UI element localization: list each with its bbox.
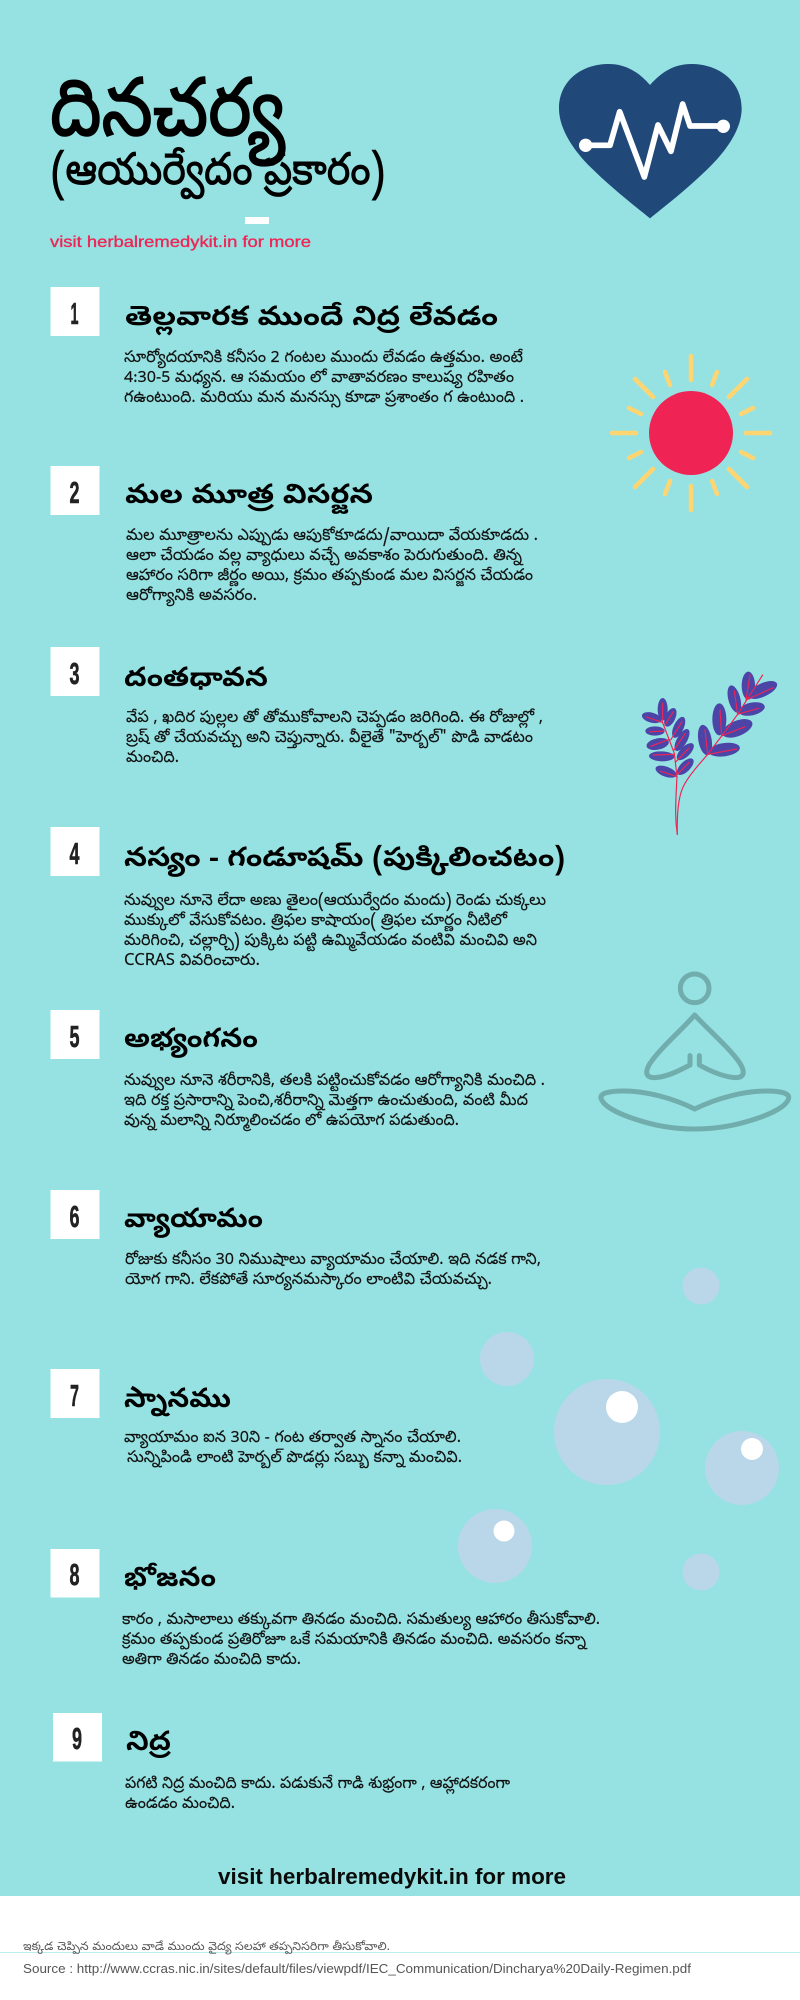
disclaimer: ఇక్కడ చెప్పిన మందులు వాడే ముందు వైద్య సలహా తప్పనిసరిగా తీసుకోవాలి. — [23, 1940, 390, 1956]
panel: step 2: ఆలా చేయడం వల్ల వ్యాధులు వచ్చే అవకాశం పెరుగుతుంది. తిన్న — [126, 546, 524, 568]
panel: step 8: భోజనం — [124, 1562, 216, 1600]
panel: step 6: రోజుకు కనీసం 30 నిముషాలు వ్యాయామం చేయాలి. ఇది నడక గాని, — [125, 1250, 541, 1272]
panel: step 8 — [50, 1549, 600, 1672]
panel: step 3: వేప , ఖదిర పుల్లల తో తోముకోవాలని చెప్పడం జరిగింది. ఈ రోజుల్లో , — [126, 708, 543, 730]
panel: step 1: గఉంటుంది. మరియు మన మనస్సు కూడా ప్రశాంతం గ ఉంటుంది . — [124, 388, 524, 410]
panel: step 6: వ్యాయామం — [124, 1205, 263, 1241]
panel: step 5: అభ్యంగనం — [124, 1025, 258, 1061]
panel: step 4: ముక్కులో వేసుకోవటం. త్రిఫల కాషాయం( త్రిఫల చూర్ణం నీటిలో — [124, 911, 509, 933]
panel: step 3: బ్రష్ తో చేయవచ్చు అని చెప్తున్నారు. వీలైతే "హెర్బల్" పొడి వాడటం — [126, 728, 533, 750]
panel: step 1: తెల్లవారక ముందే నిద్ర లేవడం — [125, 301, 498, 339]
panel: step 1: 4:30-5 మధ్యన. ఆ సమయం లో వాతావరణం కాలుష్య రహితం — [124, 368, 514, 390]
panel: step 6 — [50, 1190, 541, 1292]
bottom link text: visit herbalremedykit.in for more — [218, 1864, 566, 1889]
panel: step 1: 1 — [70, 296, 78, 331]
panel: step 7: 7 — [70, 1378, 79, 1413]
title: దినచర్య — [50, 65, 285, 174]
panel: step 7: స్నానము — [124, 1385, 231, 1421]
panel: step 9: 9 — [72, 1721, 82, 1756]
panel: step 4: నువ్వుల నూనె లేదా అణు తైలం(ఆయుర్వేదం మందు) రెండు చుక్కలు — [124, 891, 546, 913]
panel: step 5: నువ్వుల నూనె శరీరానికి, తలకి పట్టించుకోవడం ఆరోగ్యానికి మంచిది . — [124, 1071, 545, 1093]
panel: step 5: 5 — [70, 1019, 80, 1054]
panel: step 9: ఉండడం మంచిది. — [125, 1794, 235, 1816]
panel: step 3: మంచిది. — [126, 748, 179, 770]
decoration: bubbles — [458, 1268, 779, 1590]
panel: step 4 — [50, 827, 565, 973]
icon: sun — [612, 356, 770, 510]
panel: step 1: సూర్యోదయానికి కనీసం 2 గంటల ముందు లేవడం ఉత్తమం. అంటే — [124, 348, 524, 370]
panel: step 7: వ్యాయామం ఐన 30ని - గంట తర్వాత స్నానం చేయాలి. — [124, 1428, 461, 1450]
source: Source : http://www.ccras.nic.in/sites/default/files/viewpdf/IEC_Communication/Dincharya%20Daily-Regimen.pdf — [23, 1962, 692, 1976]
panel: step 9: పగటి నిద్ర మంచిది కాదు. పడుకునే గాడి శుభ్రంగా , ఆహ్లాదకరంగా — [125, 1774, 510, 1796]
panel: step 9 — [53, 1713, 510, 1816]
panel: step 6: యోగ గాని. లేకపోతే సూర్యనమస్కారం లాంటివి చేయవచ్చు. — [125, 1270, 492, 1292]
panel: step 5: వున్న మలాన్ని నిర్మూలించడం లో ఉపయోగ పడుతుంది. — [124, 1111, 459, 1133]
panel: step 2: మల మూత్రాలను ఎప్పుడు ఆపుకోకూడదు/వాయిదా వేయకూడదు . — [126, 526, 538, 548]
panel: step 8: 8 — [70, 1557, 80, 1592]
icon: meditating figure — [601, 974, 789, 1129]
subtitle: (ఆయుర్వేదం ప్రకారం) — [51, 147, 385, 206]
panel: step 4: నస్యం - గండూషమ్ (పుక్కిలించటం) — [124, 842, 565, 880]
footer — [0, 1940, 800, 1976]
panel: step 2 — [50, 466, 538, 608]
panel: step 4: 4 — [70, 836, 80, 871]
panel: step 5: ఇది రక్త ప్రసారాన్ని పెంచి,శరీరాన్ని మెత్తగా ఉంచుతుంది, వంటి మీద — [124, 1091, 528, 1113]
panel: step 3 — [50, 647, 543, 770]
icon: heart with pulse — [559, 64, 742, 218]
panel: step 4: CCRAS వివరించారు. — [124, 951, 260, 973]
panel: step 6: 6 — [70, 1199, 80, 1234]
panel: step 4: మరిగించి, చల్లార్చి) పుక్కిట పట్టి ఉమ్మివేయడం వంటివి మంచివి అని — [124, 931, 537, 953]
panel: step 7 — [50, 1369, 462, 1470]
panel: step 3: 3 — [70, 656, 80, 691]
panel: step 2: 2 — [70, 475, 80, 510]
panel: step 9: నిద్ర — [126, 1728, 171, 1764]
panel: step 3: దంతధావన — [124, 664, 268, 700]
white dash — [245, 217, 269, 224]
panel: step 2: ఆరోగ్యానికి అవసరం. — [126, 586, 257, 608]
panel: step 2: ఆహారం సరిగా జీర్ణం అయి, క్రమం తప్పకుండ మల విసర్జన చేయడం — [126, 566, 533, 588]
panel: step 2: మల మూత్ర విసర్జన — [125, 481, 373, 517]
panel: step 8: కారం , మసాలాలు తక్కువగా తినడం మంచిది. సమతుల్య ఆహారం తీసుకోవాలి. — [122, 1610, 600, 1632]
top link text: visit herbalremedykit.in for more — [50, 234, 311, 251]
icon: herb branch — [641, 672, 780, 834]
panel: step 8: క్రమం తప్పకుండ ప్రతిరోజూ ఒకే సమయానికి తినడం మంచిది. అవసరం కన్నా — [121, 1630, 588, 1652]
panel: step 1 — [50, 287, 524, 410]
panel: step 5 — [50, 1010, 545, 1133]
panel: step 8: అతిగా తినడం మంచిది కాదు. — [122, 1650, 301, 1672]
panel: step 7: సున్నిపిండి లాంటి హెర్బల్ పొడర్లు సబ్బు కన్నా మంచివి. — [127, 1448, 462, 1470]
